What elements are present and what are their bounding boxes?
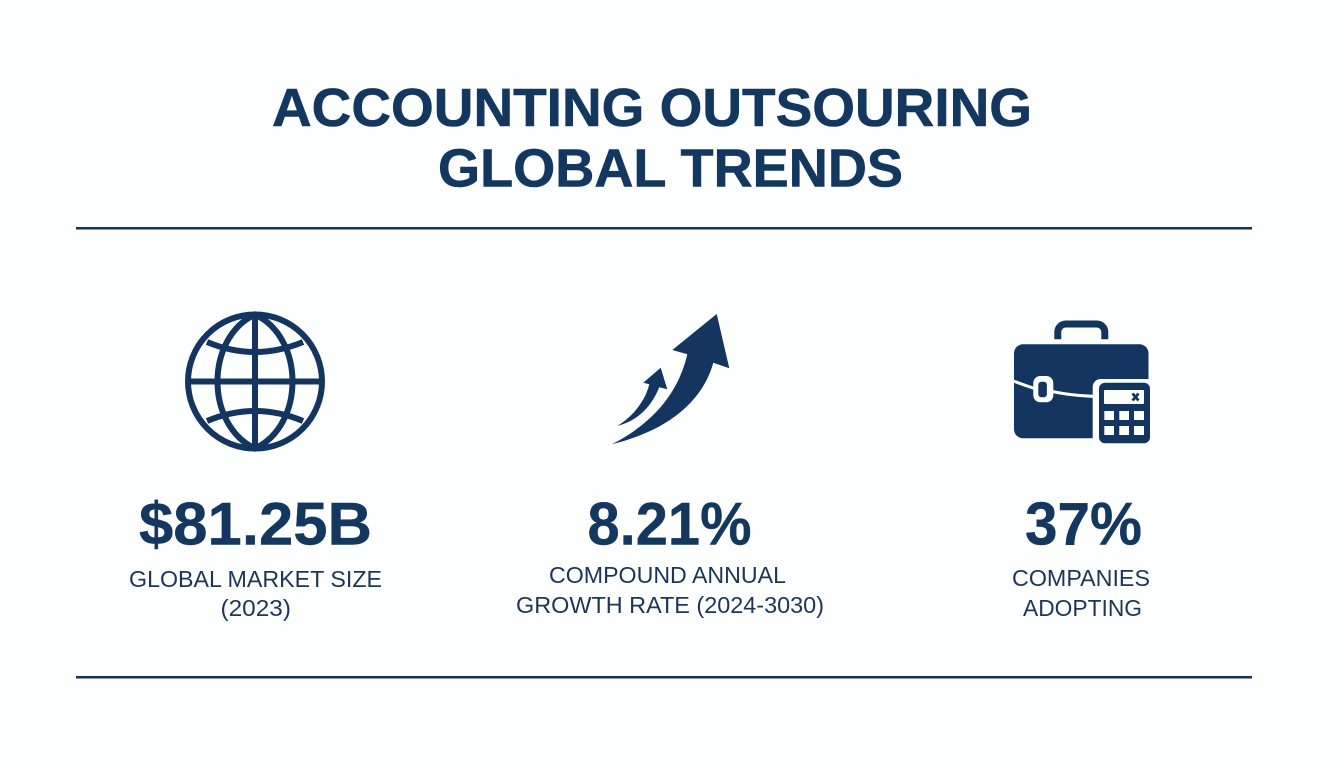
label: adoption: COMPANIES bbox=[1012, 565, 1150, 591]
label: growth rate: COMPOUND ANNUAL bbox=[549, 562, 786, 588]
title: GLOBAL TRENDS bbox=[438, 138, 903, 198]
label: growth rate bbox=[516, 562, 824, 618]
label: market size: GLOBAL MARKET SIZE bbox=[129, 566, 382, 592]
icon: briefcase with calculator bbox=[1012, 324, 1155, 449]
label: adoption: ADOPTING bbox=[1023, 595, 1142, 621]
title: ACCOUNTING OUTSOURING bbox=[272, 78, 1032, 138]
icon: growth arrows bbox=[612, 314, 729, 444]
stat: growth rate value: 8.21% bbox=[588, 490, 752, 558]
icon: globe bbox=[188, 314, 322, 448]
panel: adoption bbox=[1012, 324, 1155, 621]
label: market size bbox=[129, 566, 382, 621]
stat: adoption value: 37% bbox=[1025, 490, 1142, 558]
label: market size: (2023) bbox=[220, 595, 291, 621]
panel: market size bbox=[129, 314, 382, 621]
label: adoption bbox=[1012, 565, 1150, 621]
label: growth rate: GROWTH RATE (2024-3030) bbox=[516, 592, 824, 618]
title bbox=[272, 78, 1032, 198]
stat: market size value: $81.25B bbox=[139, 490, 372, 558]
panel: growth rate bbox=[516, 314, 824, 618]
